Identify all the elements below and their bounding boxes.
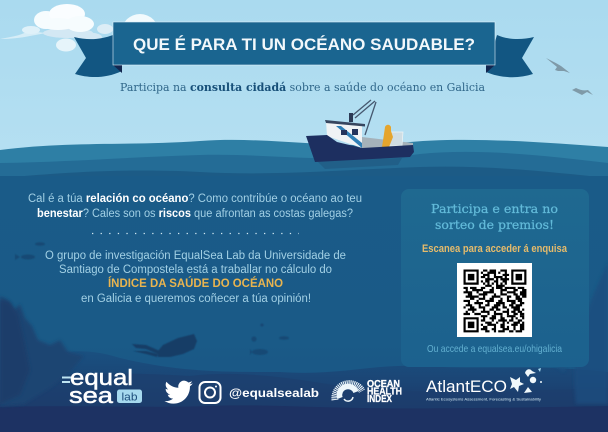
right ribbon tail	[486, 35, 534, 77]
mast rigging	[353, 100, 376, 135]
subtitle: Participa na consulta cidadá sobre a saúde do océano en Galicia	[120, 81, 485, 94]
left ribbon tail	[74, 35, 122, 77]
cloud	[0, 4, 113, 52]
scan instruction: Escanea para acceder á enquisa	[422, 243, 568, 255]
logo wordmark: INDEX	[367, 394, 392, 405]
logo: AtlantECO	[426, 368, 542, 402]
sun behind the banner	[121, 14, 159, 52]
sky background	[0, 0, 608, 175]
web link: Ou accede a equalsea.eu/ohigalicia	[427, 343, 562, 355]
description line 2: Santiago de Compostela está a traballar no cálculo do	[59, 264, 332, 276]
hull	[306, 135, 414, 162]
left seaweed	[0, 296, 84, 406]
seagull 2	[572, 88, 593, 95]
ribbon folds	[113, 65, 122, 73]
cabin	[326, 121, 362, 148]
logo: EqualSea Lab: lab	[122, 392, 138, 404]
fish	[15, 242, 289, 355]
logo: Ocean Health Index	[335, 379, 402, 405]
sea body	[0, 176, 608, 412]
boat shadow	[316, 158, 402, 169]
seabed silhouettes	[0, 262, 608, 432]
seagull 1	[546, 58, 570, 73]
panel heading: sorteo de premios!	[435, 217, 554, 232]
diver	[132, 334, 197, 357]
dotted divider	[92, 232, 299, 234]
panel heading: Participa e entra no	[431, 201, 558, 216]
description line 1: O grupo de investigación EqualSea Lab da Universidade de	[45, 250, 346, 262]
fisherman	[382, 125, 393, 147]
question line 2: benestar? Cales son os riscos que afrontan as costas galegas?	[37, 208, 353, 220]
description text	[45, 250, 346, 305]
waves	[0, 140, 608, 200]
logo wordmark: OCEAN	[367, 379, 400, 390]
banner	[74, 22, 534, 77]
boat	[306, 100, 414, 169]
highlighted index name: ÍNDICE DA SAÚDE DO OCÉANO	[108, 275, 283, 290]
logo wordmark	[367, 379, 402, 405]
question line 1: Cal é a túa relación co océano? Como contribúe o océano ao teu	[28, 193, 362, 205]
panel: prize draw and QR	[401, 189, 589, 367]
logo: AtlantECO: AtlantECO	[426, 377, 507, 396]
logo: EqualSea Lab	[62, 365, 142, 408]
right seaweed	[574, 262, 608, 404]
school centre	[252, 349, 268, 355]
social handle: @equalsealab	[229, 388, 319, 400]
logo: AtlantECO: Atlantic Ecosystems Assessment, Forecasting & Sustainability	[426, 398, 541, 402]
description line 4: en Galicia e queremos coñecer a túa opinión!	[81, 293, 311, 305]
plankton icons	[510, 368, 542, 393]
deck cage	[389, 132, 403, 146]
logo sunburst	[335, 384, 362, 401]
icon: instagram	[200, 382, 220, 403]
logo: EqualSea Lab: sea	[69, 383, 114, 408]
question text	[28, 193, 362, 220]
deck	[362, 137, 413, 148]
QR code	[457, 263, 532, 337]
icon: twitter	[164, 381, 193, 404]
title: QUE É PARA TI UN OCÉANO SAUDABLE?	[133, 35, 475, 54]
logo wordmark: HEALTH	[367, 386, 402, 398]
seagulls	[546, 58, 593, 95]
panel heading	[431, 201, 558, 232]
logo: EqualSea Lab: equal	[70, 365, 133, 390]
school left	[35, 242, 45, 246]
